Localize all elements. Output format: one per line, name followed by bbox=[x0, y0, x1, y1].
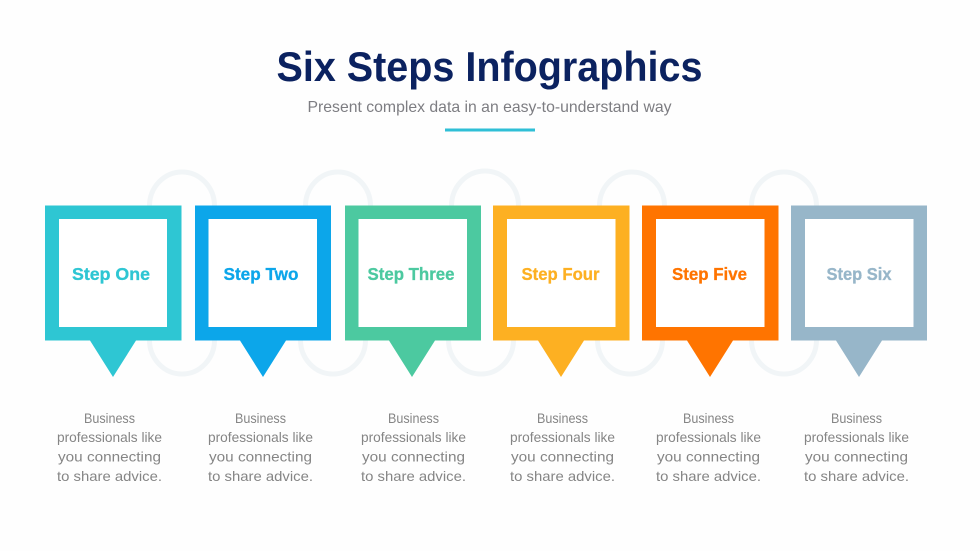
step two description: you connecting bbox=[209, 448, 312, 464]
step four description: you connecting bbox=[511, 448, 614, 464]
step four description: to share advice. bbox=[510, 468, 615, 484]
step one description: professionals like bbox=[57, 429, 162, 445]
step three description: you connecting bbox=[362, 448, 465, 464]
step one marker: Step One bbox=[72, 264, 150, 284]
step three description: professionals like bbox=[361, 429, 466, 445]
step three description bbox=[361, 410, 466, 484]
step five description: to share advice. bbox=[656, 468, 761, 484]
step four description bbox=[510, 410, 615, 484]
step one marker bbox=[45, 206, 182, 377]
step six description: to share advice. bbox=[804, 468, 909, 484]
step two description: Business bbox=[235, 410, 286, 426]
subtitle: Present complex data in an easy-to-understand way bbox=[308, 99, 672, 116]
step six description bbox=[804, 410, 909, 484]
step two description: to share advice. bbox=[208, 468, 313, 484]
step five description bbox=[656, 410, 761, 484]
step three marker bbox=[345, 206, 481, 377]
step two marker bbox=[195, 206, 331, 377]
step five description: professionals like bbox=[656, 429, 761, 445]
title: Six Steps Infographics bbox=[276, 43, 702, 90]
step three marker: Step Three bbox=[368, 264, 455, 284]
step four description: professionals like bbox=[510, 429, 615, 445]
step one description: Business bbox=[84, 410, 135, 426]
step six marker: Step Six bbox=[826, 264, 892, 284]
step four description: Business bbox=[537, 410, 588, 426]
step six description: Business bbox=[831, 410, 882, 426]
step five description: Business bbox=[683, 410, 734, 426]
chain links connecting the steps bbox=[150, 171, 816, 374]
step five marker: Step Five bbox=[672, 264, 747, 284]
step four marker: Step Four bbox=[522, 264, 600, 284]
title underline bbox=[445, 128, 535, 132]
step two description bbox=[208, 410, 313, 484]
step one description bbox=[57, 410, 162, 484]
step three description: to share advice. bbox=[361, 468, 466, 484]
step four marker bbox=[493, 206, 630, 377]
step five marker bbox=[642, 206, 778, 377]
step six marker bbox=[791, 206, 927, 377]
step six description: you connecting bbox=[805, 448, 908, 464]
step one description: to share advice. bbox=[57, 468, 162, 484]
step two description: professionals like bbox=[208, 429, 313, 445]
step five description: you connecting bbox=[657, 448, 760, 464]
step six description: professionals like bbox=[804, 429, 909, 445]
step two marker: Step Two bbox=[224, 264, 298, 284]
step three description: Business bbox=[388, 410, 439, 426]
step one description: you connecting bbox=[58, 448, 161, 464]
